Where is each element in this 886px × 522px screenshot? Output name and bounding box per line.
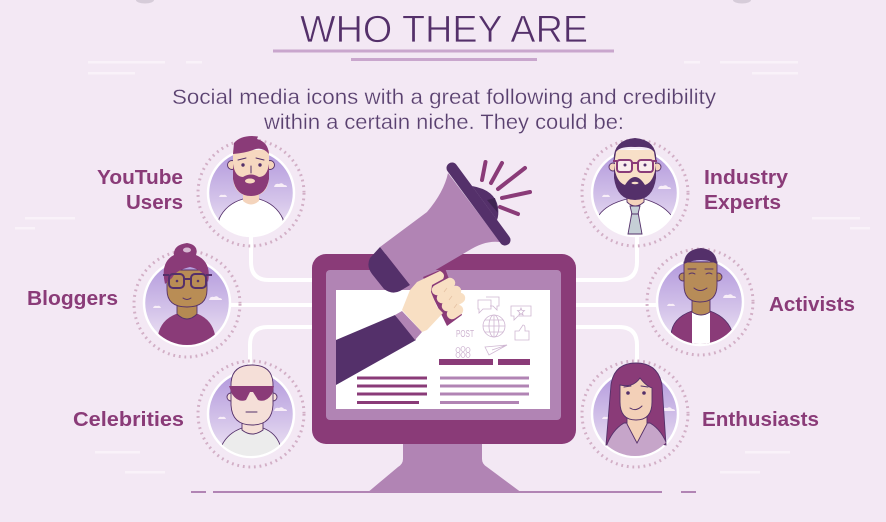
avatar: enthusiast [582, 361, 688, 467]
avatar: industry expert [582, 138, 688, 246]
avatar: activist [647, 248, 753, 355]
monitor [312, 254, 576, 444]
base line [191, 491, 696, 493]
article bars [357, 359, 530, 404]
label: Industry Experts [704, 167, 789, 214]
post icons: POST [456, 328, 474, 340]
label: Enthusiasts: Enthusiasts [702, 409, 819, 431]
label: Activists: Activists [769, 294, 855, 316]
label: Industry Experts: Experts [704, 192, 781, 214]
label: Celebrities: Celebrities [73, 409, 184, 431]
megaphone [368, 168, 505, 293]
title: WHO THEY ARE [300, 9, 588, 51]
avatar: celebrity [198, 361, 304, 467]
post icons [456, 297, 531, 358]
intro text: within a certain niche. They could be: [263, 111, 624, 134]
intro text: Social media icons with a great following and credibility [172, 86, 717, 109]
label: Industry Experts: Industry [704, 167, 789, 189]
avatar: YouTube user [198, 136, 304, 246]
monitor stand [367, 440, 522, 493]
label: YouTube Users: YouTube [97, 167, 183, 189]
label: YouTube Users [97, 167, 183, 214]
arm holding megaphone [336, 268, 462, 385]
connector lines [226, 232, 660, 376]
label: Bloggers: Bloggers [27, 288, 118, 310]
label: YouTube Users: Users [126, 192, 183, 214]
title underline [273, 50, 614, 61]
intro text [172, 86, 717, 134]
sound rays [482, 162, 530, 214]
avatar: blogger [134, 243, 240, 357]
